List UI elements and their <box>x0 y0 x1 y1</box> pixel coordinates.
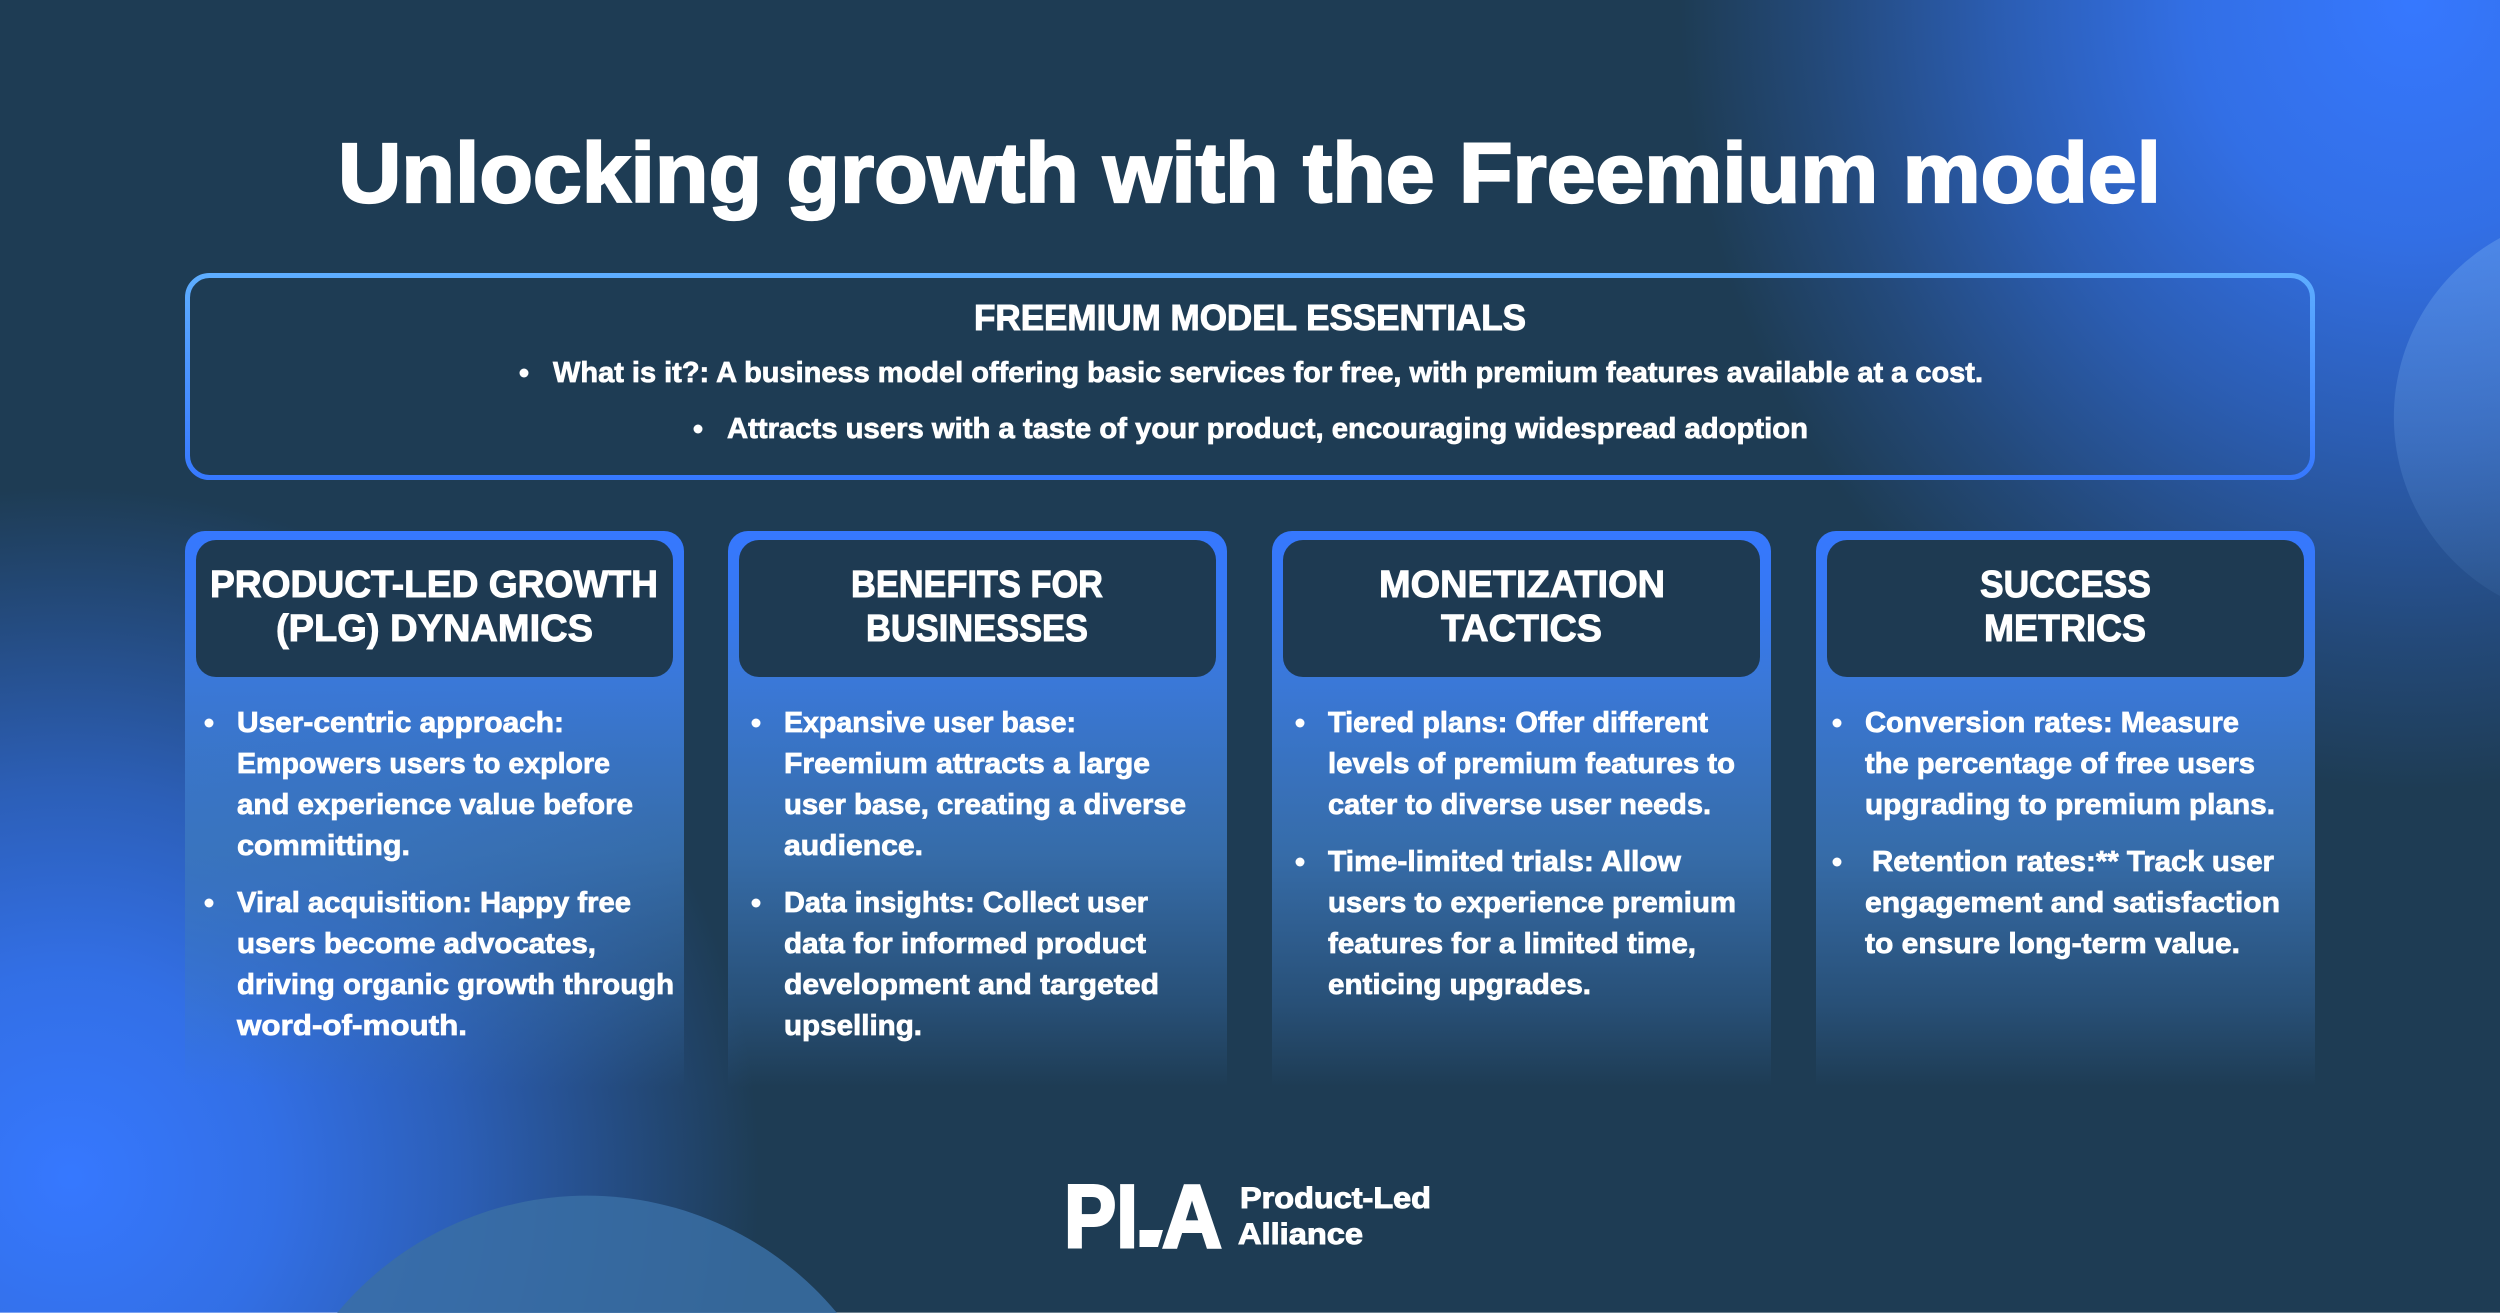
card header: MONETIZATION <box>1379 564 1665 606</box>
logo wordmark: Alliance <box>1238 1218 1363 1251</box>
card bullets: features for a limited time, <box>1328 928 1696 960</box>
card header <box>196 540 673 677</box>
panel: success metrics <box>1816 531 2315 1087</box>
card bullets: Empowers users to explore <box>237 748 610 780</box>
card header: SUCCESS <box>1980 564 2151 606</box>
panel: monetization tactics <box>1272 531 1771 1087</box>
logo mark: PI <box>1064 1166 1138 1266</box>
card bullets: Viral acquisition: Happy free <box>237 887 631 919</box>
logo mark: A <box>1162 1166 1222 1266</box>
panel: freemium model essentials <box>188 276 2312 478</box>
essentials heading: FREEMIUM MODEL ESSENTIALS <box>974 297 1526 338</box>
card bullets: User-centric approach: <box>237 707 564 739</box>
card header: PRODUCT-LED GROWTH <box>210 564 658 606</box>
card bullets: data for informed product <box>784 928 1146 960</box>
card bullets <box>752 707 1186 1042</box>
card bullets: Freemium attracts a large <box>784 748 1150 780</box>
decorative circle: right <box>2394 238 2500 596</box>
card bullets: user base, creating a diverse <box>784 789 1186 821</box>
essentials bullet 2: Attracts users with a taste of your product, encouraging widespread adoption <box>727 413 1808 445</box>
card bullets: driving organic growth through <box>237 969 674 1001</box>
card bullets: cater to diverse user needs. <box>1328 789 1711 821</box>
card bullets <box>1832 707 2280 960</box>
card bullets: word-of-mouth. <box>236 1010 467 1042</box>
card bullets <box>204 707 674 1042</box>
card bullets: Retention rates:** Track user <box>1872 846 2274 878</box>
title: Unlocking growth with the Freemium model <box>338 126 2161 220</box>
card header <box>739 540 1216 677</box>
logo wordmark: Product-Led <box>1240 1182 1431 1215</box>
card bullets: Conversion rates: Measure <box>1865 707 2239 739</box>
card bullets: to ensure long-term value. <box>1865 928 2240 960</box>
card bullets: Data insights: Collect user <box>784 887 1148 919</box>
essentials bullet 1: What is it?: A business model offering basic services for free, with premium features available at a cost. <box>553 357 1983 389</box>
panel: benefits for businesses <box>728 531 1227 1087</box>
card header: (PLG) DYNAMICS <box>276 608 593 650</box>
card bullets: upgrading to premium plans. <box>1865 789 2275 821</box>
card bullets: enticing upgrades. <box>1328 969 1591 1001</box>
card header: TACTICS <box>1441 608 1602 650</box>
card bullets: the percentage of free users <box>1865 748 2255 780</box>
card bullets: Time-limited trials: Allow <box>1328 846 1681 878</box>
card header: METRICS <box>1984 608 2146 650</box>
card bullets: audience. <box>784 830 923 862</box>
logo wordmark <box>1238 1182 1431 1251</box>
panel: product-led growth dynamics <box>185 531 684 1087</box>
card bullets: Expansive user base: <box>784 707 1076 739</box>
card bullets: users become advocates, <box>237 928 596 960</box>
card bullets: engagement and satisfaction <box>1865 887 2280 919</box>
card bullets: development and targeted <box>784 969 1159 1001</box>
card header: BUSINESSES <box>866 608 1088 650</box>
card header <box>1827 540 2304 677</box>
card bullets: upselling. <box>784 1010 922 1042</box>
card header: BENEFITS FOR <box>851 564 1103 606</box>
decorative circle: bottom <box>337 1196 837 1313</box>
card bullets: users to experience premium <box>1328 887 1736 919</box>
card header <box>1283 540 1760 677</box>
logo mark <box>1064 1166 1222 1266</box>
card bullets <box>1296 707 1736 1001</box>
card bullets: levels of premium features to <box>1328 748 1735 780</box>
logo: Product-Led Alliance <box>1064 1166 1431 1266</box>
card bullets: and experience value before <box>237 789 633 821</box>
card bullets: committing. <box>237 830 410 862</box>
card bullets: Tiered plans: Offer different <box>1328 707 1708 739</box>
